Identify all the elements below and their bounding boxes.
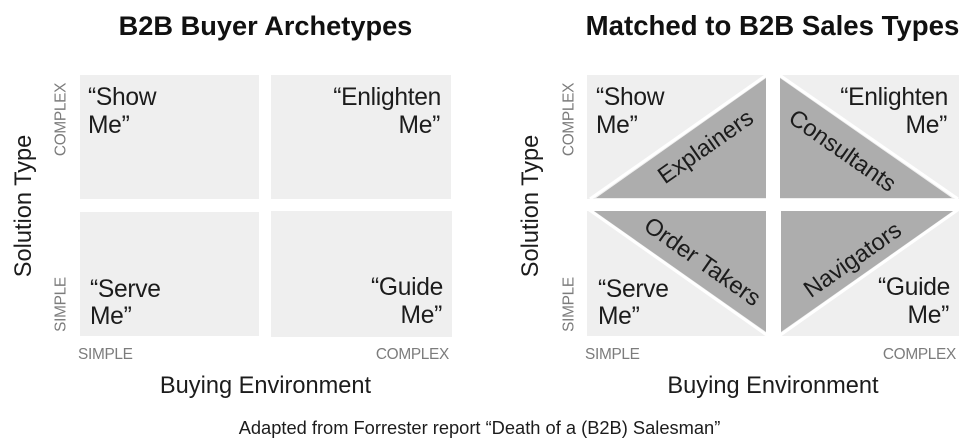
quadrant: Guide Me: [271, 211, 452, 337]
quadrant: Show Me and Explainers: [587, 74, 768, 199]
panel: matched sales types matrix: [518, 74, 959, 399]
quadrant: Guide Me and Navigators: Me”: [908, 302, 949, 329]
quadrant: Enlighten Me and Consultants: Consultants: [784, 105, 901, 198]
quadrant: Guide Me: “Guide: [371, 274, 443, 301]
x axis title: Buying Environment: [667, 373, 879, 399]
panel: buyer archetypes matrix: [11, 75, 452, 399]
quadrant: Show Me and Explainers: Explainers: [653, 105, 759, 190]
quadrant: Guide Me and Navigators: [779, 209, 959, 336]
quadrant: Serve Me and Order Takers: “Serve: [598, 276, 669, 303]
quadrant: Serve Me: Me”: [90, 303, 132, 330]
source note: Adapted from Forrester report “Death of a (B2B) Salesman”: [239, 417, 720, 438]
y axis title: Solution Type: [518, 135, 544, 277]
quadrant: Enlighten Me: [271, 75, 451, 199]
x axis title: Buying Environment: [160, 373, 372, 399]
quadrant: Serve Me: [80, 212, 259, 336]
title: B2B Buyer Archetypes: B2B Buyer Archetypes: [119, 10, 412, 41]
quadrant: Show Me: Me”: [88, 112, 130, 139]
quadrant: Serve Me and Order Takers: Me”: [598, 303, 640, 330]
y tick: SIMPLE: SIMPLE: [52, 277, 70, 332]
quadrant: Show Me and Explainers: Me”: [596, 112, 638, 139]
x tick: COMPLEX: COMPLEX: [883, 346, 956, 363]
quadrant: Enlighten Me and Consultants: [778, 74, 959, 199]
y tick: COMPLEX: COMPLEX: [560, 83, 578, 156]
quadrant: Enlighten Me and Consultants: “Enlighten: [840, 84, 948, 111]
quadrant: Enlighten Me: “Enlighten: [333, 84, 441, 111]
x tick: COMPLEX: COMPLEX: [376, 346, 449, 363]
x tick: SIMPLE: SIMPLE: [78, 346, 133, 363]
y axis title: Solution Type: [11, 135, 37, 277]
quadrant: Enlighten Me: Me”: [399, 112, 440, 139]
quadrant: Guide Me and Navigators: Navigators: [799, 217, 907, 303]
quadrant: Show Me: [80, 75, 259, 199]
y tick: COMPLEX: COMPLEX: [52, 83, 70, 156]
quadrant: Guide Me and Navigators: “Guide: [878, 274, 950, 301]
quadrant: Guide Me: Me”: [401, 302, 442, 329]
quadrant: Serve Me and Order Takers: [587, 209, 768, 336]
quadrant: Show Me: “Show: [88, 84, 157, 111]
quadrant: Serve Me: “Serve: [90, 276, 161, 303]
quadrant: Enlighten Me and Consultants: Me”: [906, 112, 947, 139]
y tick: SIMPLE: SIMPLE: [560, 277, 578, 332]
quadrant: Serve Me and Order Takers: Order Takers: [639, 213, 765, 312]
title: Matched to B2B Sales Types: Matched to B2B Sales Types: [586, 10, 959, 41]
quadrant: Show Me and Explainers: “Show: [596, 84, 665, 111]
x tick: SIMPLE: SIMPLE: [585, 346, 640, 363]
